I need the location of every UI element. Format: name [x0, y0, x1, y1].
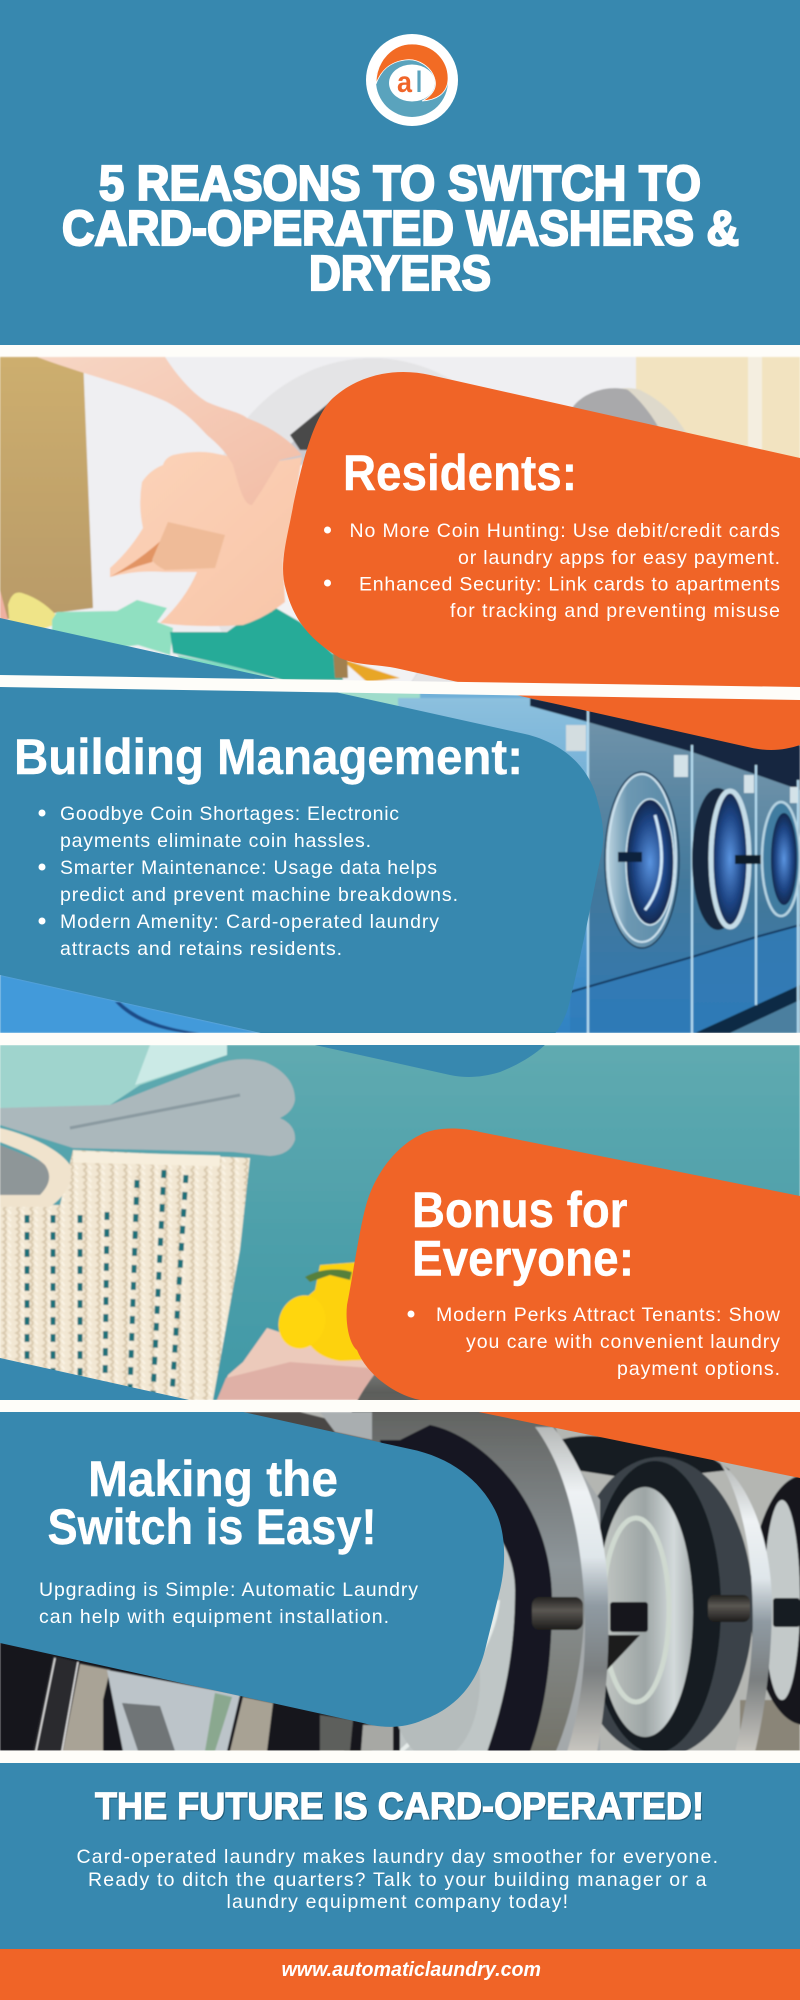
heading: making the switch: Making the	[88, 1451, 338, 1507]
heading: bonus for everyone: Bonus for	[412, 1182, 628, 1238]
header band	[0, 0, 800, 345]
white divider: slanted	[0, 675, 800, 700]
list: residents: or laundry apps for easy payment.	[458, 547, 780, 569]
list: residents	[324, 520, 780, 622]
list: bonus: Modern Perks Attract Tenants: Show	[436, 1304, 781, 1326]
heading: building management: Building Management:	[14, 729, 523, 785]
list: residents: Enhanced Security: Link cards to apartments	[359, 574, 780, 596]
heading: bonus for everyone: Everyone:	[412, 1230, 634, 1286]
text: upgrading: Upgrading is Simple: Automatic Laundry	[39, 1579, 418, 1601]
white divider: photo 2 and 3	[0, 1033, 800, 1045]
list: bonus: you care with convenient laundry	[466, 1331, 780, 1353]
list: building management: predict and prevent machine breakdowns.	[60, 884, 458, 906]
panel: building management blue blob	[0, 618, 603, 1077]
text: closing paragraph: Card-operated laundry makes laundry day smoother for everyone.	[76, 1846, 718, 1868]
list: building management: payments eliminate coin hassles.	[60, 830, 371, 852]
heading: making the switch	[48, 1451, 376, 1555]
text: closing paragraph: laundry equipment company today!	[226, 1891, 568, 1913]
list: residents: for tracking and preventing misuse	[450, 600, 780, 622]
logo: l	[415, 66, 423, 99]
title	[62, 157, 739, 301]
list: building management	[38, 803, 458, 960]
heading: bonus for everyone	[412, 1182, 634, 1286]
heading: residents: Residents:	[343, 445, 577, 501]
list: bonus	[408, 1304, 781, 1380]
title: DRYERS	[309, 247, 491, 301]
photo: hand pulling laundry from washer	[0, 357, 800, 732]
panel: residents orange blob	[283, 372, 800, 750]
list: building management: attracts and retains residents.	[60, 938, 342, 960]
list: building management: Modern Amenity: Card-operated laundry	[60, 911, 439, 933]
panel: switch blue blob	[0, 1358, 504, 1727]
photo: blue washing machines	[0, 687, 800, 1033]
photo: laundry basket with towels	[0, 1045, 800, 1400]
heading: the future is card-operated: THE FUTURE IS CARD-OPERATED!	[95, 1786, 704, 1828]
list: residents: No More Coin Hunting: Use debit/credit cards	[350, 520, 780, 542]
logo: a	[397, 66, 412, 99]
white divider: photo 4 and footer	[0, 1750, 800, 1763]
title: CARD-OPERATED WASHERS &	[62, 202, 739, 256]
text: closing paragraph	[76, 1846, 718, 1913]
title: 5 REASONS TO SWITCH TO	[99, 157, 701, 211]
heading: making the switch: Switch is Easy!	[48, 1499, 376, 1555]
list: bonus: payment options.	[617, 1358, 780, 1380]
closing band	[0, 1763, 800, 1949]
text: upgrading: can help with equipment installation.	[39, 1606, 389, 1628]
list: building management: Goodbye Coin Shortages: Electronic	[60, 803, 399, 825]
panel: bonus orange blob	[347, 1129, 800, 1478]
footer url: www.automaticlaundry.com	[282, 1959, 541, 1981]
photo: chrome washer doors	[0, 1330, 800, 1850]
white divider: photo 3 and 4	[0, 1400, 800, 1412]
text: upgrading	[39, 1579, 418, 1628]
text: closing paragraph: Ready to ditch the quarters? Talk to your building manager or a	[88, 1869, 707, 1891]
logo	[366, 34, 458, 126]
list: building management: Smarter Maintenance: Usage data helps	[60, 857, 437, 879]
footer band	[0, 1949, 800, 2000]
